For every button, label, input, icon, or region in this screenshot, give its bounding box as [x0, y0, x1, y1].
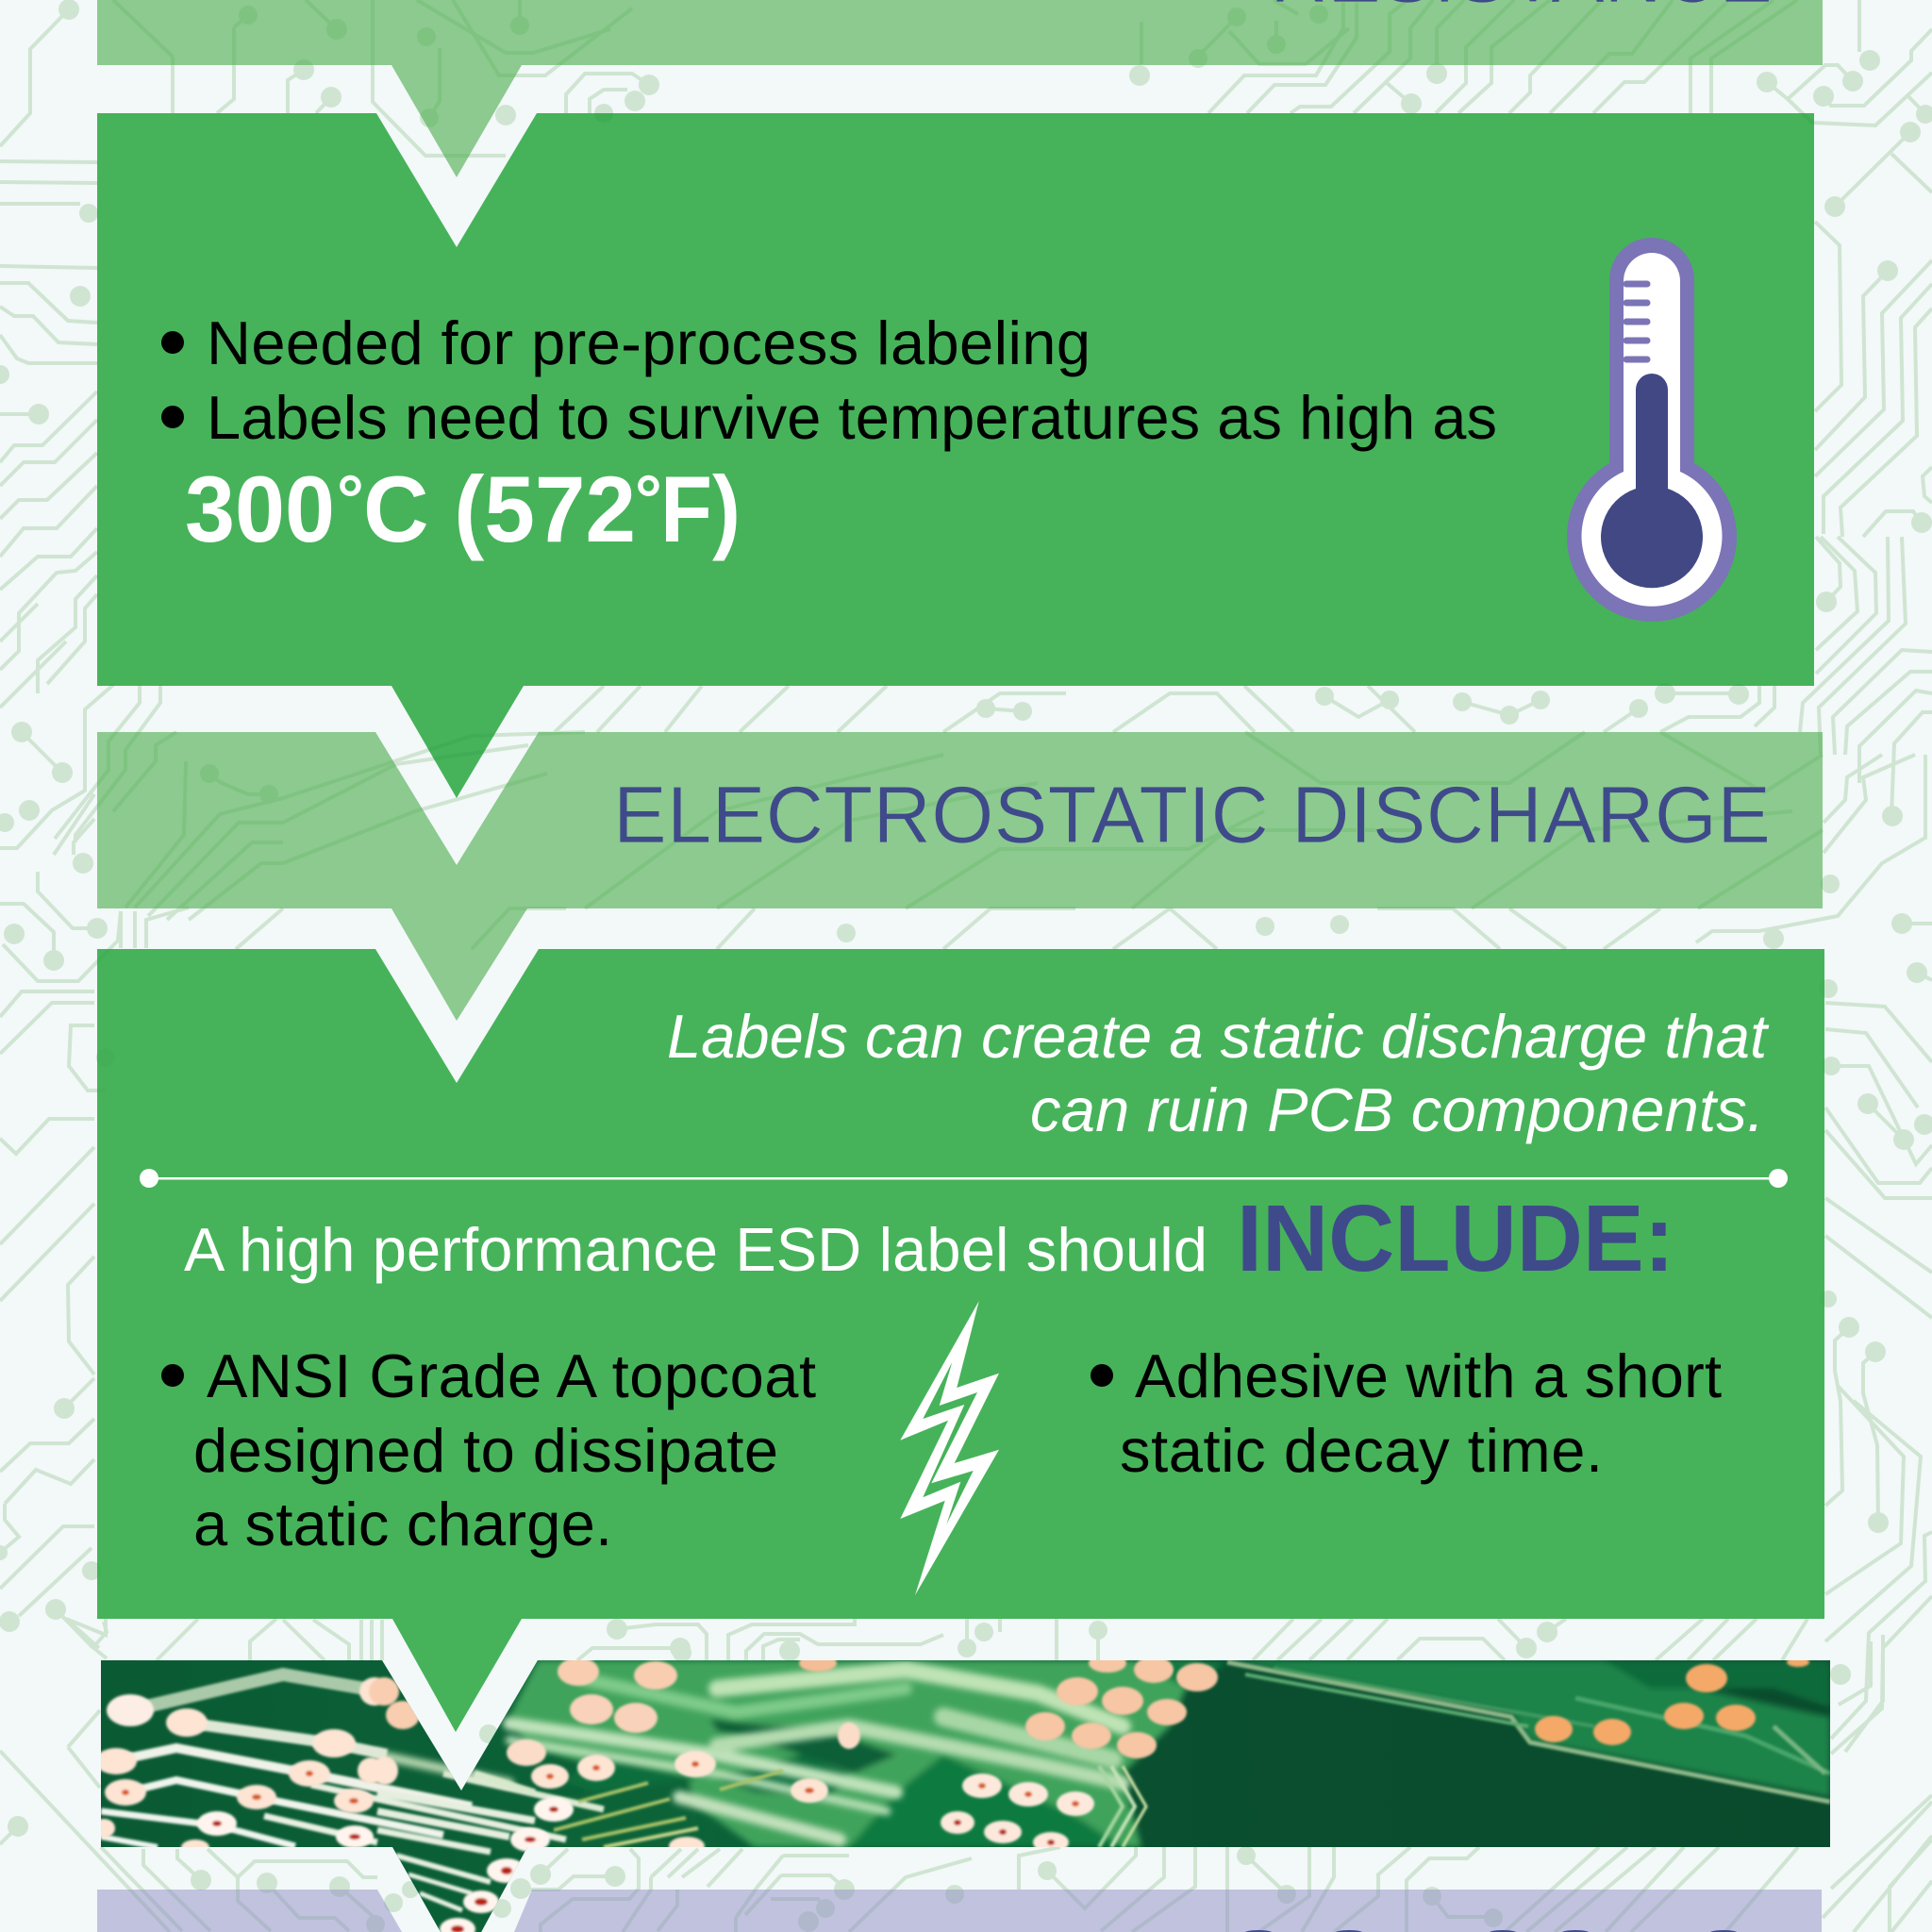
pad centres	[122, 1761, 1079, 1807]
blurred mid green zone	[509, 1660, 1830, 1847]
temperature callout	[185, 457, 741, 561]
bullet: ANSI grade A topcoat	[161, 1341, 816, 1558]
panel: electrostatic discharge heading band	[97, 732, 1823, 1021]
bullet: ANSI grade A topcoat: a static charge.	[193, 1490, 612, 1558]
temperature callout: °	[337, 462, 364, 538]
temperature callout: C (572	[363, 457, 636, 561]
temperature callout: 300	[185, 457, 335, 561]
italic intro text: can ruin PCB components.	[1030, 1075, 1764, 1144]
icon: lightning bolt	[900, 1301, 999, 1595]
subheading: a high performance ESD label should include: A high performance ESD label should	[184, 1215, 1208, 1284]
panel: resistance heading band	[97, 0, 1823, 177]
bullet list: temperature requirements: Needed for pre-process labeling	[207, 308, 1091, 377]
bullet: adhesive with short static decay: static decay time.	[1120, 1416, 1603, 1485]
italic intro text: Labels can create a static discharge that	[667, 1002, 1770, 1071]
photo: printed circuit board	[92, 1651, 1840, 1932]
subheading: a high performance ESD label should include: INCLUDE:	[1237, 1186, 1674, 1291]
panel: next section heading band	[97, 1890, 1822, 1932]
panel: ESD label requirements	[97, 734, 1824, 1732]
blurred light traces on green zone	[377, 1670, 1123, 1840]
subheading: a high performance ESD label should include	[184, 1186, 1674, 1291]
bullet: ANSI grade A topcoat: designed to dissipate	[193, 1416, 778, 1485]
bullet list: temperature requirements	[161, 308, 1497, 452]
heading: electrostatic discharge: ELECTROSTATIC DISCHARGE	[613, 771, 1771, 860]
temperature callout: F)	[660, 457, 741, 561]
bullet: ANSI grade A topcoat: ANSI Grade A topcoat	[207, 1341, 816, 1410]
bullet list: temperature requirements: Labels need to survive temperatures as high as	[207, 383, 1497, 452]
temperature callout: °	[635, 462, 662, 538]
bullet: adhesive with short static decay	[1091, 1341, 1722, 1485]
italic intro text	[667, 1002, 1770, 1144]
sharp stripes	[101, 1662, 1830, 1910]
divider with end dots	[140, 1169, 1788, 1188]
panel: high temperature labeling	[97, 113, 1814, 798]
solder pads	[92, 1654, 1809, 1932]
bullet: adhesive with short static decay: Adhesive with a short	[1135, 1341, 1722, 1410]
icon: thermometer	[1567, 238, 1737, 622]
